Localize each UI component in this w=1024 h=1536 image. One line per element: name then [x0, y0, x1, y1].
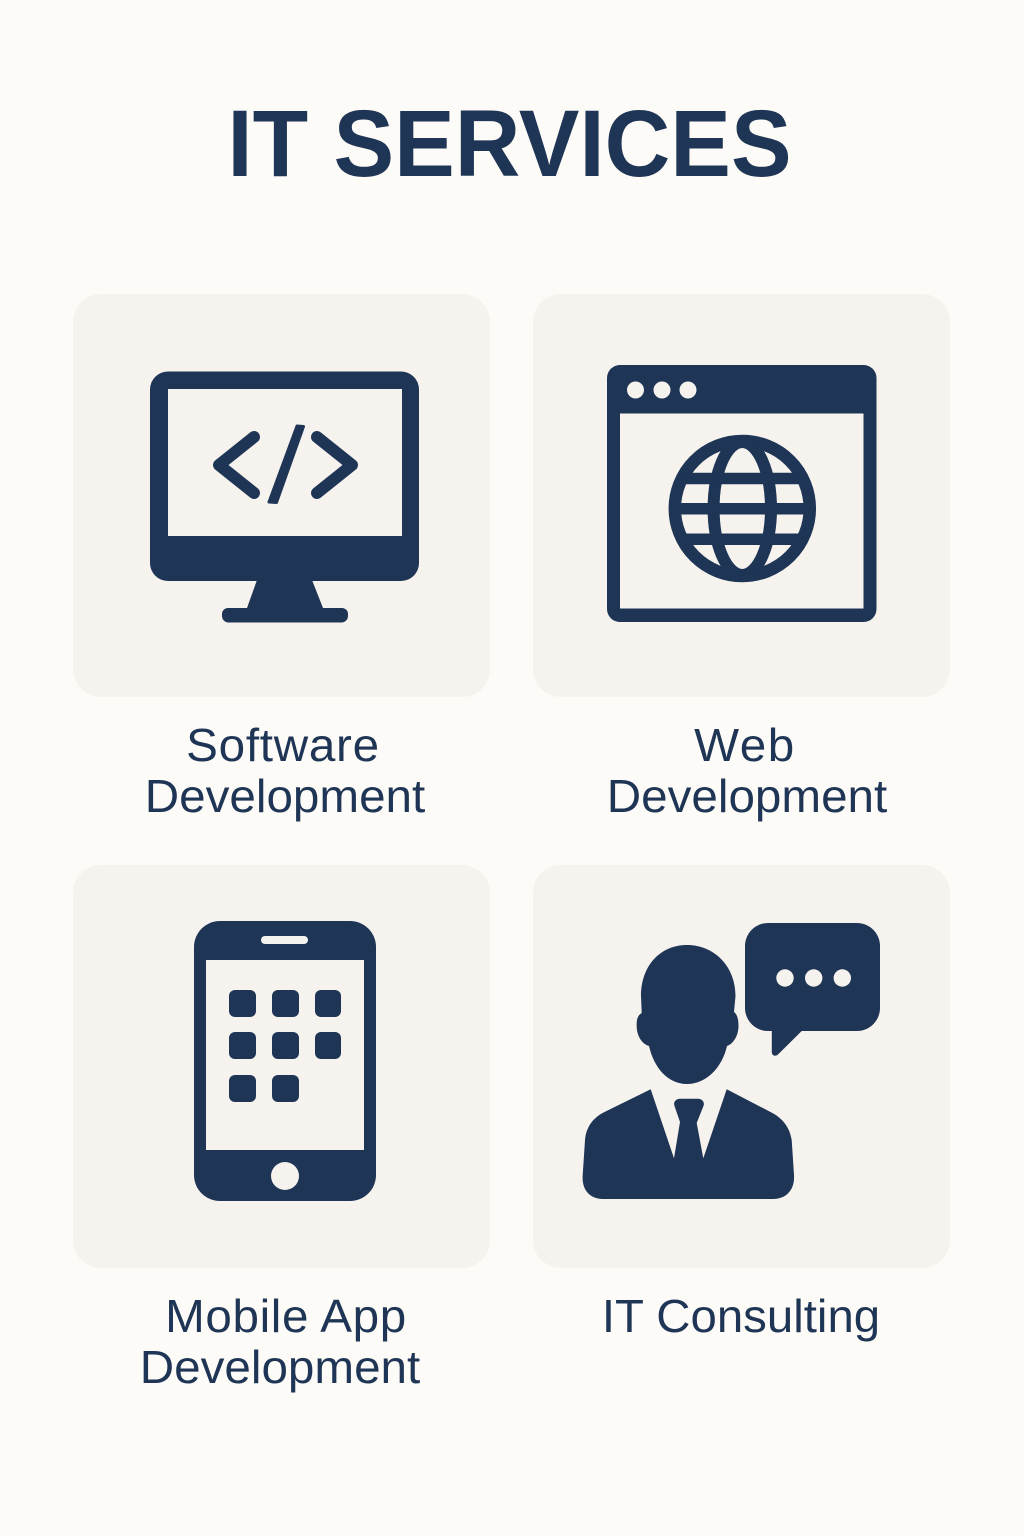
panel: mobile app development card: [73, 865, 490, 1268]
title: IT SERVICES: [227, 91, 792, 197]
icon: consultant with speech bubble: [583, 923, 880, 1199]
label: software development: Development: [145, 770, 425, 822]
icon: smartphone with app grid: [194, 921, 376, 1201]
label: web development: Web: [694, 719, 796, 771]
label: software development: [145, 719, 425, 822]
label: web development: [607, 719, 887, 822]
label: IT consulting: IT Consulting: [602, 1290, 880, 1342]
icon: monitor with code: [150, 372, 419, 622]
label: web development: Development: [607, 770, 887, 822]
panel: web development card: [533, 294, 950, 697]
icon: browser with globe: [607, 365, 876, 622]
label: software development: Software: [186, 719, 380, 771]
panel: software development card: [73, 294, 490, 697]
label: mobile app development: Development: [139, 1341, 420, 1393]
label: mobile app development: [139, 1290, 420, 1393]
label: mobile app development: Mobile App: [165, 1290, 406, 1342]
panel: IT consulting card: [533, 865, 950, 1268]
